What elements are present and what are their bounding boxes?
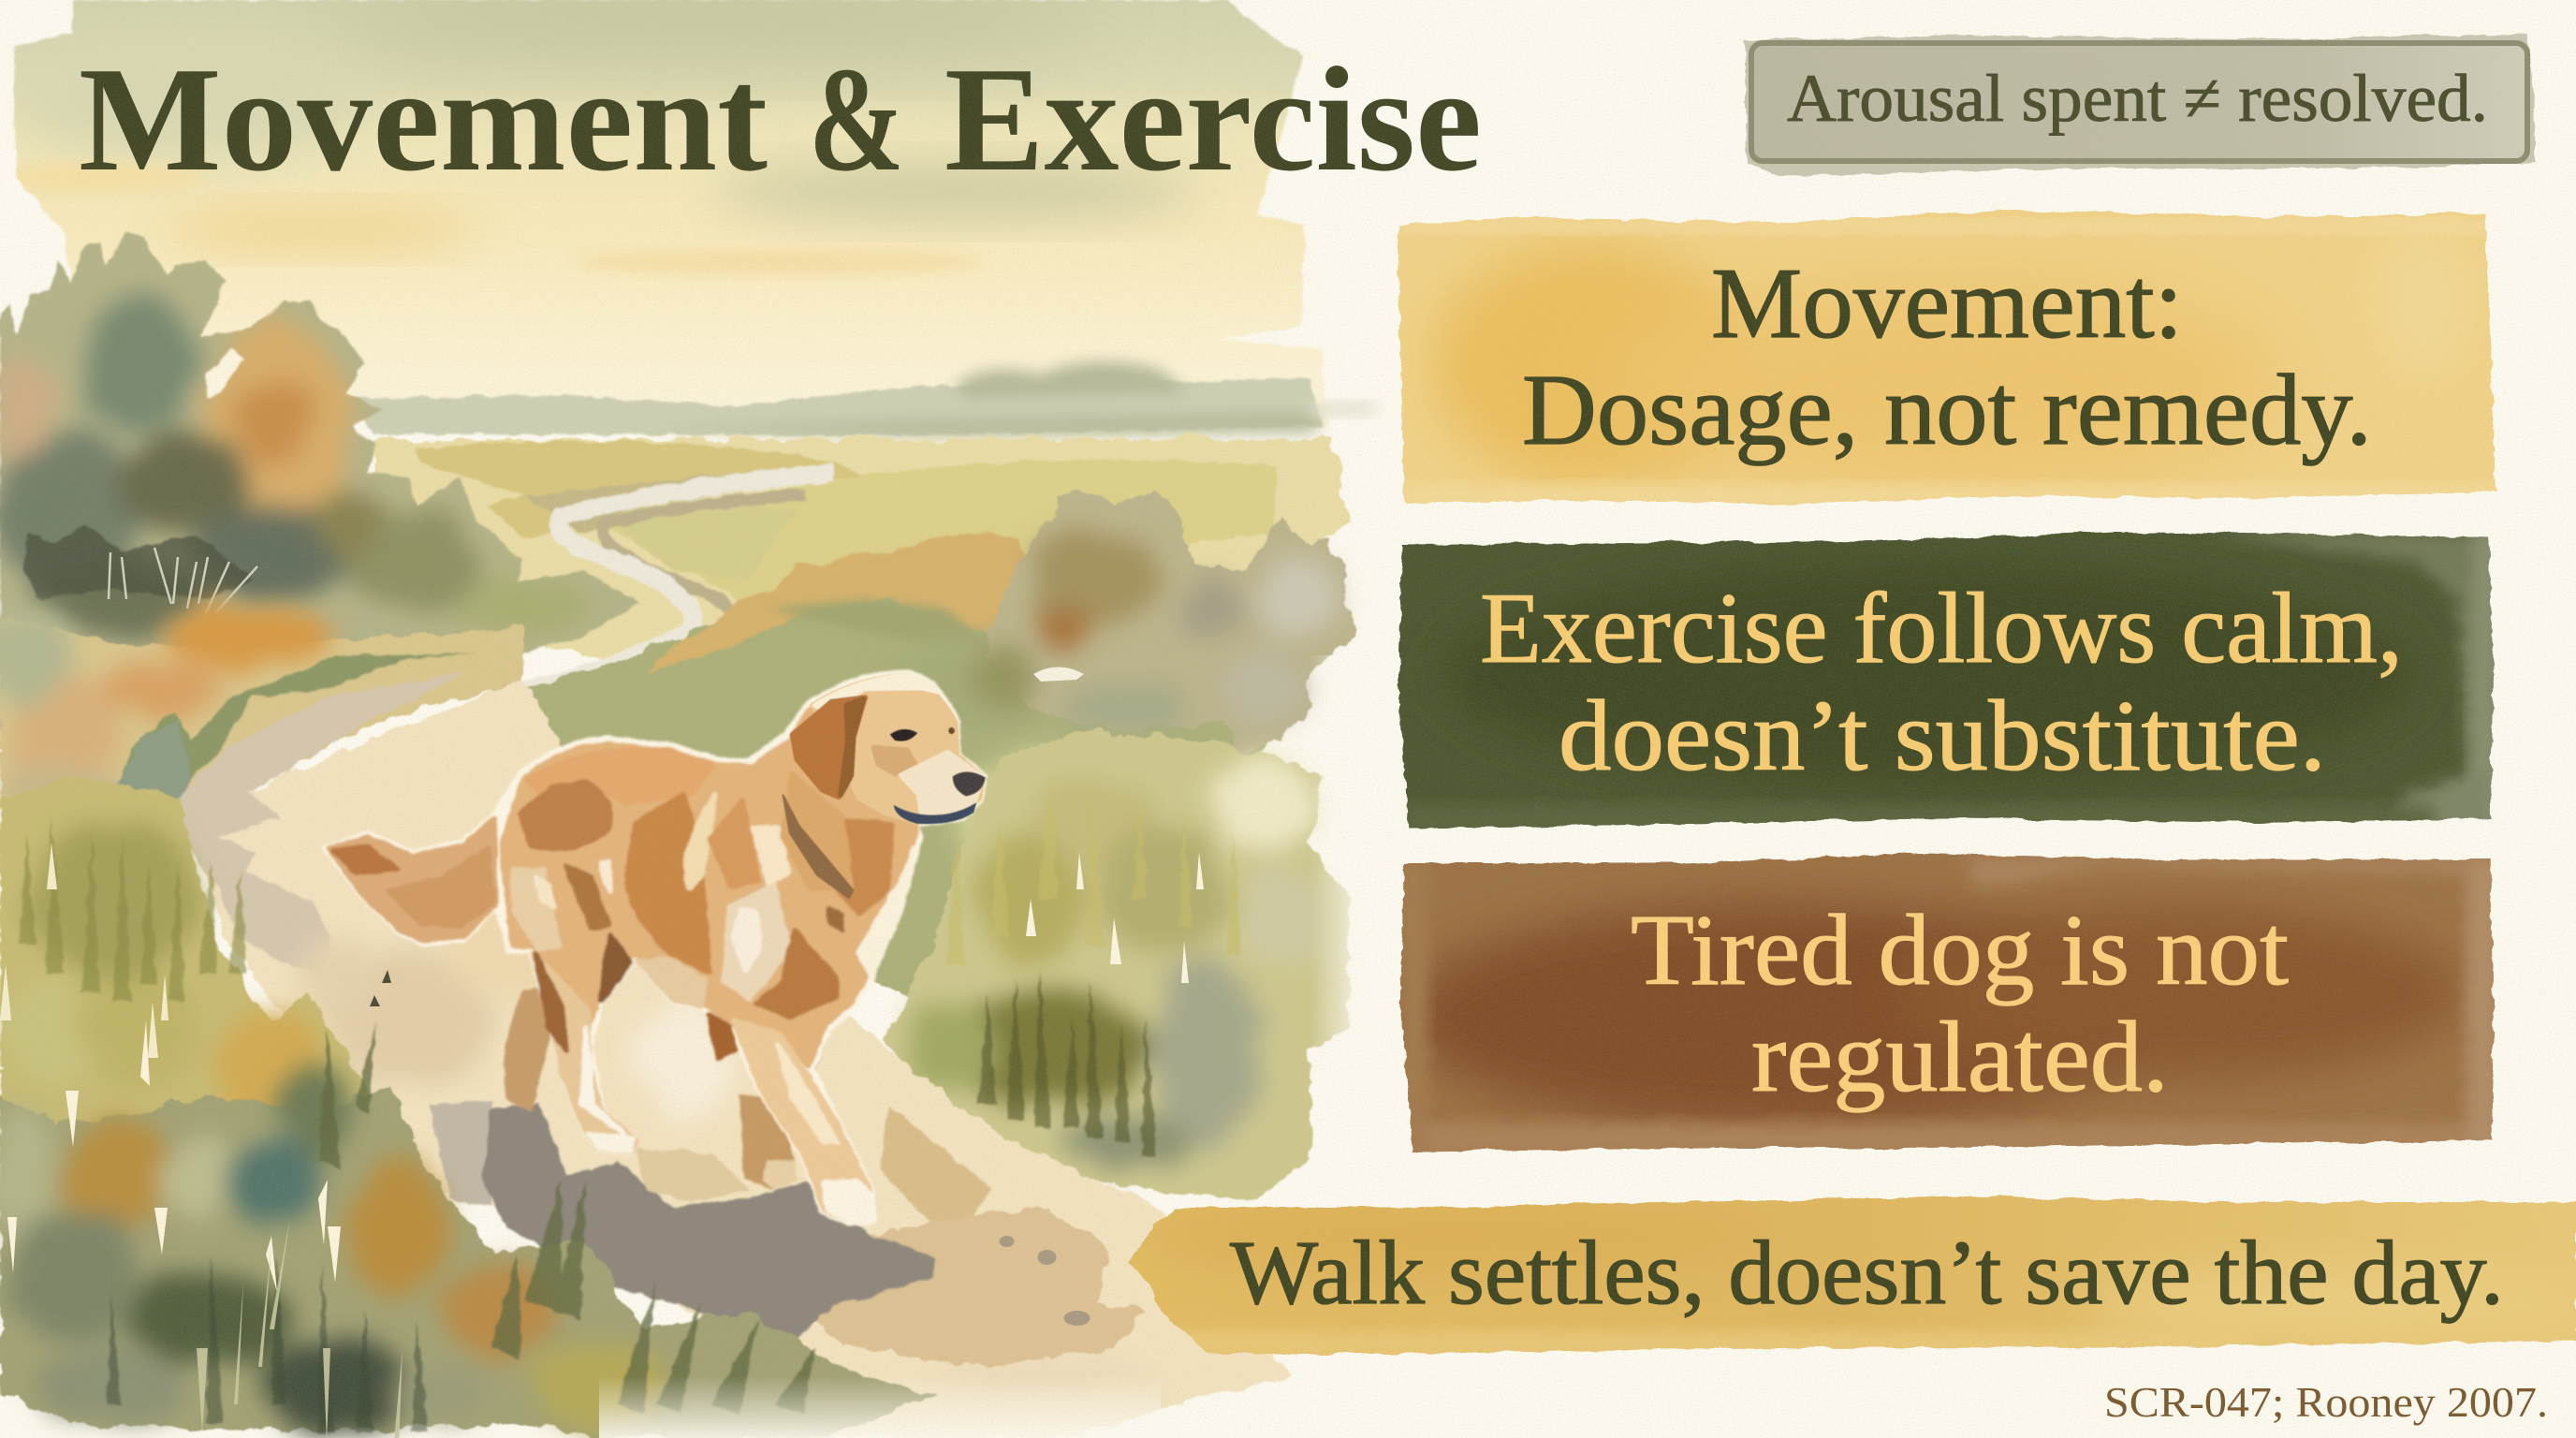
distant hills — [346, 361, 1376, 436]
right bushes — [969, 492, 1353, 758]
golden fields — [374, 438, 1348, 674]
left tree mass — [0, 234, 639, 749]
winding river — [496, 473, 833, 697]
panel: exercise follows calm — [1398, 532, 2499, 833]
bottom edge fade — [599, 1376, 1161, 1438]
title: & — [809, 36, 904, 202]
panel text: Dosage, not remedy. — [1522, 355, 2372, 466]
dog far legs — [506, 990, 828, 1188]
dog head — [793, 675, 983, 822]
right edge fade — [1310, 655, 1367, 1236]
badge: arousal spent — [1745, 34, 2535, 176]
left grass upper — [0, 777, 384, 1236]
meadow band in front of trees — [0, 605, 524, 936]
dog tail — [329, 818, 495, 941]
right meadow grasses — [885, 730, 1348, 1198]
panel text: Tired dog is not — [1631, 895, 2289, 1006]
dog eye — [890, 729, 916, 741]
illustration: golden retriever walking a marsh path — [0, 0, 1376, 1438]
panel text: doesn’t substitute. — [1559, 681, 2326, 792]
dog shadow — [429, 1100, 936, 1348]
dog far eye — [948, 727, 955, 734]
dirt path — [178, 671, 1292, 1438]
panel text: regulated. — [1751, 1002, 2169, 1113]
dog collar — [783, 795, 854, 898]
sky wash — [0, 0, 1327, 445]
panel text: Movement: — [1711, 248, 2183, 360]
golden retriever — [325, 672, 985, 1224]
banner text: Walk settles, doesn’t save the day. — [1230, 1223, 2504, 1324]
banner: walk settles — [1128, 1196, 2576, 1357]
panel: movement dosage — [1398, 210, 2496, 506]
left grass lower mass — [0, 1020, 936, 1438]
green hill behind the dog — [505, 534, 1264, 1030]
panel text: Exercise follows calm, — [1480, 573, 2403, 684]
citation: SCR-047; Rooney 2007. — [2104, 1378, 2548, 1426]
dog body — [325, 672, 985, 1224]
title: Exercise — [944, 36, 1482, 202]
panel: tired dog — [1399, 854, 2499, 1156]
paper inlet between trees — [205, 346, 243, 398]
badge: arousal spent: Arousal spent ≠ resolved. — [1787, 61, 2488, 136]
dog front leg — [709, 1015, 871, 1221]
dog mouth — [894, 803, 976, 824]
title: Movement — [79, 36, 768, 202]
dog nose — [953, 772, 985, 796]
